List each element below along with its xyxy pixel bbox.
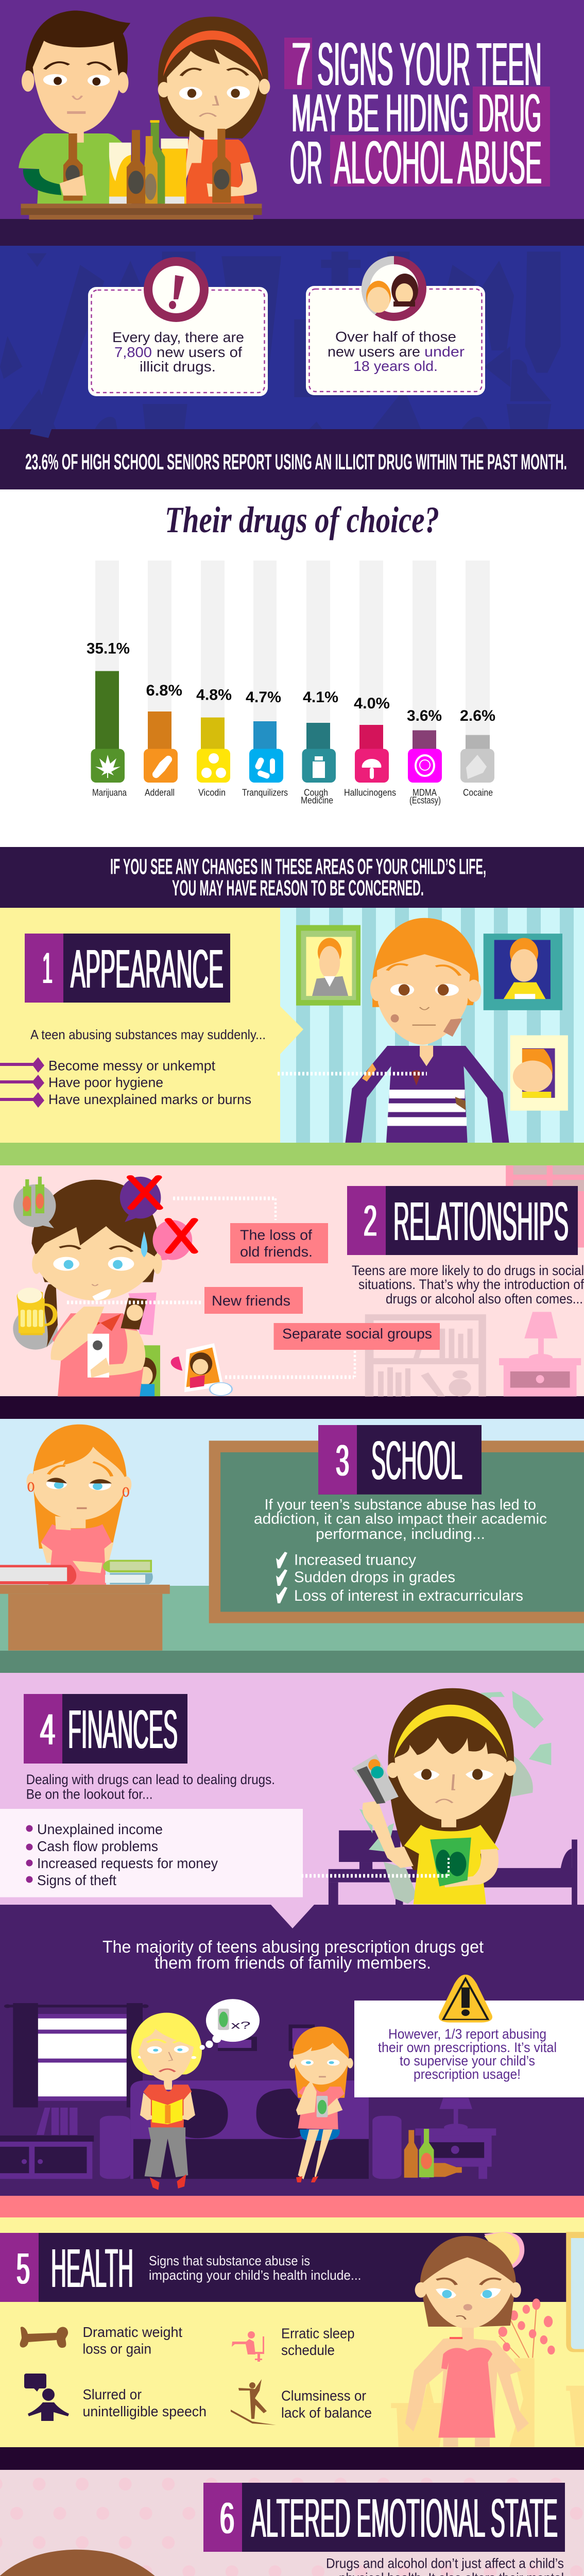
warning note bbox=[354, 1975, 584, 2097]
illustration: wall frames and messy boy bbox=[296, 918, 568, 1143]
intro text: Drugs and alcohol don’t just affect a child’s bbox=[326, 2555, 564, 2571]
heading: appearance: 1 bbox=[42, 944, 53, 992]
intro text bbox=[26, 1772, 275, 1802]
heading: finances bbox=[24, 1694, 187, 1764]
heading: health: 5 bbox=[16, 2244, 30, 2293]
warning note: prescription usage! bbox=[414, 2066, 521, 2082]
illustration: teens with drinks bbox=[19, 11, 270, 219]
symptom: speech: unintelligible speech bbox=[82, 2403, 207, 2419]
symptom: weight: loss or gain bbox=[82, 2341, 151, 2357]
panel: prescription drugs bbox=[0, 1937, 584, 2190]
intro text: A teen abusing substances may suddenly... bbox=[30, 1027, 266, 1042]
dotted connector bbox=[278, 1072, 427, 1076]
percentage values: 2.6% bbox=[460, 707, 495, 724]
symptom: weight: Dramatic weight bbox=[82, 2324, 182, 2340]
illustration: girl with money and card bbox=[329, 1688, 577, 1906]
card: 7,800 new users: Every day, there are bbox=[112, 329, 244, 345]
heading: their drugs of choice: Their drugs of choice? bbox=[165, 499, 439, 540]
intro text: impacting your child’s health include... bbox=[149, 2267, 362, 2283]
icon: warning triangle bbox=[439, 1975, 492, 2023]
illustration: living room with mother and daughter: x? bbox=[231, 2020, 251, 2031]
bullet list bbox=[0, 1057, 251, 1108]
card: over half under 18: Over half of those bbox=[335, 329, 456, 345]
card: 7,800 new users: illicit drugs. bbox=[140, 359, 216, 375]
percentage values: 4.8% bbox=[196, 687, 232, 704]
statement: them from friends of family members. bbox=[154, 1953, 431, 1972]
card: 7,800 new users: new users of bbox=[157, 344, 242, 360]
bedroom background bbox=[365, 1165, 584, 1397]
illustration: large girl face bbox=[0, 2550, 213, 2576]
card: 7,800 new users bbox=[88, 257, 268, 396]
category labels: (Ecstasy) bbox=[409, 795, 441, 806]
percentage values bbox=[87, 640, 495, 724]
symptom: speech bbox=[24, 2374, 207, 2421]
panel: 6 altered emotional state bbox=[0, 2483, 578, 2576]
percentage values: 4.1% bbox=[303, 689, 338, 706]
card: over half under 18: under bbox=[424, 344, 465, 360]
heading: relationships bbox=[347, 1186, 578, 1255]
callout: old friends: The loss of bbox=[240, 1227, 312, 1243]
checklist: Sudden drops in grades bbox=[294, 1569, 455, 1586]
heading: school: 3 bbox=[336, 1436, 349, 1485]
panel: 5 health: HEALTH bbox=[51, 2238, 133, 2299]
icons: drug types bbox=[95, 753, 487, 779]
symptom: sleep: schedule bbox=[281, 2342, 335, 2358]
panel: 5 health bbox=[0, 2232, 584, 2447]
bar chart: drugs of choice bbox=[87, 561, 495, 806]
card: over half under 18: new users are bbox=[328, 344, 420, 360]
panel: 4 finances bbox=[0, 1688, 577, 1928]
symptom: balance: lack of balance bbox=[281, 2405, 372, 2421]
checklist: Increased truancy bbox=[294, 1552, 416, 1568]
callout: old friends: old friends. bbox=[240, 1244, 313, 1260]
category labels: Marijuana bbox=[92, 787, 127, 798]
panel: 3 school bbox=[0, 1425, 584, 1651]
title: 7 bbox=[291, 30, 311, 98]
title bbox=[284, 30, 550, 197]
card: 7,800 new users: 7,800 bbox=[114, 344, 152, 360]
checklist bbox=[276, 1552, 523, 1604]
checklist: Loss of interest in extracurriculars bbox=[294, 1587, 523, 1604]
icon: exclamation medallion bbox=[144, 257, 209, 322]
title: OR bbox=[290, 129, 322, 197]
list box: Unexplained income bbox=[37, 1821, 163, 1837]
symptom: speech: Slurred or bbox=[82, 2386, 142, 2402]
warning note: to supervise your child’s bbox=[400, 2053, 535, 2069]
chalkboard bbox=[209, 1440, 584, 1623]
intro text: Dealing with drugs can lead to dealing drugs. bbox=[26, 1772, 275, 1787]
panel: 1 appearance: APPEARANCE bbox=[71, 939, 224, 999]
heading: health bbox=[0, 2233, 133, 2302]
bullet list: Become messy or unkempt bbox=[48, 1058, 215, 1074]
callout: new friends: New friends bbox=[212, 1293, 290, 1309]
symptom: sleep bbox=[232, 2326, 354, 2362]
callout: separate groups bbox=[274, 1323, 440, 1350]
icon: teens donut bbox=[362, 256, 426, 321]
card: over half under 18: 18 years old. bbox=[353, 358, 438, 374]
heading: appearance bbox=[25, 934, 230, 1003]
intro text: Be on the lookout for... bbox=[26, 1787, 153, 1802]
intro text bbox=[352, 1263, 584, 1307]
category labels: Medicine bbox=[301, 795, 333, 806]
background pattern of bottles bbox=[0, 251, 560, 438]
heading: finances: 4 bbox=[40, 1705, 55, 1754]
list box bbox=[0, 1809, 303, 1897]
illustration: girl with phone and photos bbox=[13, 1177, 232, 1397]
percentage values: 4.0% bbox=[354, 695, 390, 712]
intro text bbox=[149, 2253, 362, 2283]
category labels: Cough bbox=[304, 787, 328, 798]
category labels: Hallucinogens bbox=[344, 787, 396, 798]
intro text: If your teen’s substance abuse has led to bbox=[265, 1497, 536, 1513]
dotted connectors bbox=[67, 1198, 355, 1377]
symptom: sleep: Erratic sleep bbox=[281, 2326, 354, 2341]
category labels: Cocaine bbox=[463, 787, 493, 798]
category labels: Adderall bbox=[145, 787, 175, 798]
panel: 1 appearance bbox=[0, 918, 568, 1143]
heading: relationships: 2 bbox=[364, 1196, 377, 1245]
panel: 2 relationships bbox=[13, 1165, 584, 1397]
heading: school bbox=[318, 1425, 482, 1495]
list box: Signs of theft bbox=[37, 1872, 116, 1888]
panel: hero bbox=[19, 11, 550, 219]
list box: Increased requests for money bbox=[37, 1855, 218, 1871]
callout: new friends bbox=[204, 1287, 303, 1314]
percentage values: 35.1% bbox=[87, 640, 130, 657]
bullet list: Have poor hygiene bbox=[48, 1075, 163, 1090]
statement bbox=[102, 1937, 484, 1972]
category labels bbox=[92, 787, 493, 806]
statement: The majority of teens abusing prescription drugs get bbox=[102, 1937, 484, 1956]
symptom: balance bbox=[231, 2379, 372, 2425]
percentage values: 6.8% bbox=[146, 682, 182, 699]
bullet list: Have unexplained marks or burns bbox=[48, 1092, 251, 1107]
list box: Cash flow problems bbox=[37, 1838, 158, 1854]
category labels: MDMA bbox=[413, 787, 437, 798]
percentage values: 3.6% bbox=[407, 707, 442, 724]
callout: old friends bbox=[230, 1223, 328, 1263]
banner: changes in child's life bbox=[110, 855, 486, 901]
illustration: girl at desk bbox=[0, 1425, 170, 1651]
intro text bbox=[254, 1497, 547, 1543]
symptom: weight bbox=[20, 2324, 182, 2357]
intro text: performance, including... bbox=[316, 1526, 485, 1543]
illustration: unhealthy woman and room bbox=[391, 2232, 584, 2447]
category labels: Tranquilizers bbox=[242, 787, 288, 798]
card: over half under 18 bbox=[306, 256, 485, 395]
panel: 4 finances: FINANCES bbox=[68, 1699, 178, 1760]
panel: daily new users bbox=[0, 251, 560, 438]
warning note: their own prescriptions. It’s vital bbox=[378, 2040, 557, 2055]
heading: altered emotional state: 6 bbox=[220, 2494, 234, 2542]
intro text: Signs that substance abuse is bbox=[149, 2253, 310, 2268]
symptom: balance: Clumsiness or bbox=[281, 2387, 366, 2404]
callout arrow bbox=[271, 1905, 314, 1928]
callout: separate groups: Separate social groups bbox=[282, 1326, 432, 1342]
dotted connector bbox=[301, 1858, 449, 1876]
illustration: living room with mother and daughter bbox=[0, 1999, 496, 2190]
percentage values: 4.7% bbox=[246, 689, 281, 706]
warning note: However, 1/3 report abusing bbox=[388, 2026, 546, 2042]
category labels: Vicodin bbox=[198, 787, 226, 798]
intro text: addiction, it can also impact their academic bbox=[254, 1511, 547, 1528]
